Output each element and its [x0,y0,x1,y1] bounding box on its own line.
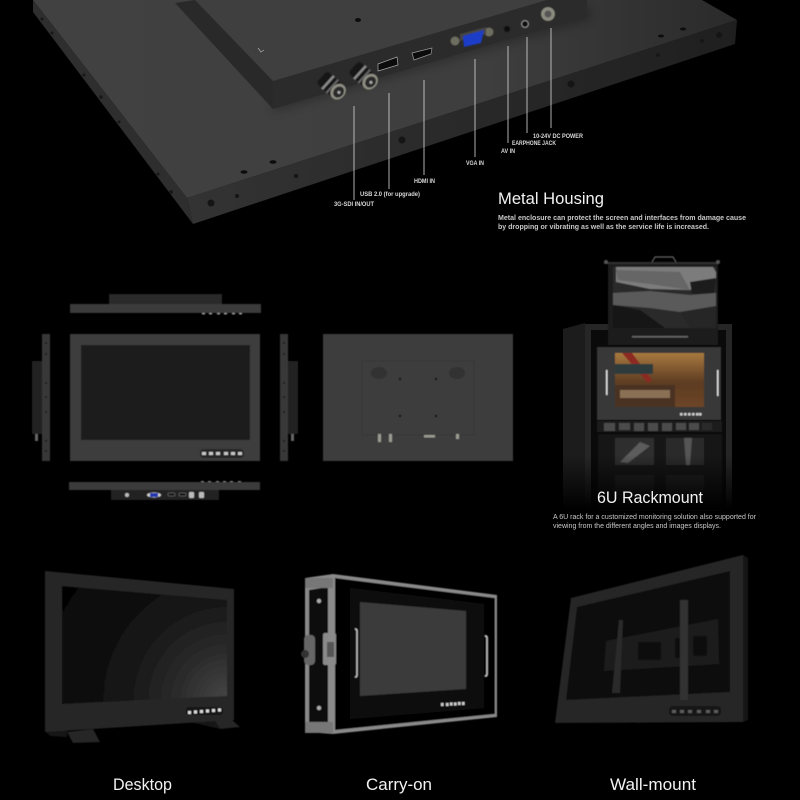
panel: wall-mount monitor [555,555,748,723]
view: bottom [69,481,260,500]
text: metal housing description: Metal enclosure can protect the screen and interfaces from damage cause [498,215,746,222]
label: Carry-on: Carry-on [366,775,432,794]
case handles [355,629,487,677]
desktop stand feet [45,718,240,743]
connector labels: EARPHONE JACK [512,141,557,147]
connector labels: 10-24V DC POWER [533,134,584,140]
view: left side [32,334,50,461]
case corner brackets [305,578,333,733]
connector labels: AV IN [501,149,515,155]
panel: orthographic views [32,294,513,500]
pull-out top monitor [604,257,720,345]
wall mount bracket [604,600,719,700]
main rack monitor [597,347,721,420]
desktop control buttons [186,707,223,715]
view: top [70,294,261,314]
case metal frame [305,574,497,734]
mounted monitor [350,588,484,719]
connector labels: HDMI IN [414,179,435,185]
module box [175,0,590,112]
label: Desktop: Desktop [113,775,172,794]
connector leader lines [354,28,551,200]
port: VGA [450,27,494,47]
case left lid [309,587,328,722]
connector labels: VGA IN [466,161,484,167]
connector labels [334,134,584,208]
panel: carry-on case [301,574,497,734]
connector labels: USB 2.0 (for upgrade) [360,192,420,198]
case latches [301,599,336,710]
thumbnail strip and lower screens [597,421,722,510]
port: USB and HDMI [378,48,432,71]
port: AV, earphone and DC power [504,7,555,32]
desktop monitor screen [62,586,227,704]
text: rackmount description: A 6U rack for a customized monitoring solution also supported for [553,514,757,521]
view: rear [323,334,513,461]
wall monitor buttons [669,706,721,716]
wall monitor body [555,555,743,723]
text: metal housing description [498,215,746,231]
enclosure base plate [33,0,737,224]
case buttons [441,702,464,706]
view: right side [280,334,298,461]
wall monitor side [743,555,748,722]
rack cabinet [563,323,732,510]
wall monitor screen [566,571,730,700]
text: rackmount description [553,514,757,530]
panel: metal housing rear view [33,0,737,224]
connector labels: 3G-SDI IN/OUT [334,202,374,208]
panel: desktop monitor [45,571,240,743]
desktop monitor body [45,571,234,732]
label: Wall-mount: Wall-mount [610,775,696,794]
port: BNC connectors [316,60,381,103]
case interior [335,578,495,730]
rack fade [560,455,735,510]
case screen [360,602,466,696]
text: rackmount description: viewing from the different angles and images displays. [553,523,721,530]
panel: 6U rackmount [560,257,735,510]
view: front [70,334,260,461]
text: metal housing description: by dropping or vibrating as well as the service life is increased. [498,224,709,231]
heading: 6U Rackmount: 6U Rackmount [597,488,703,507]
heading: Metal Housing: Metal Housing [498,189,604,208]
